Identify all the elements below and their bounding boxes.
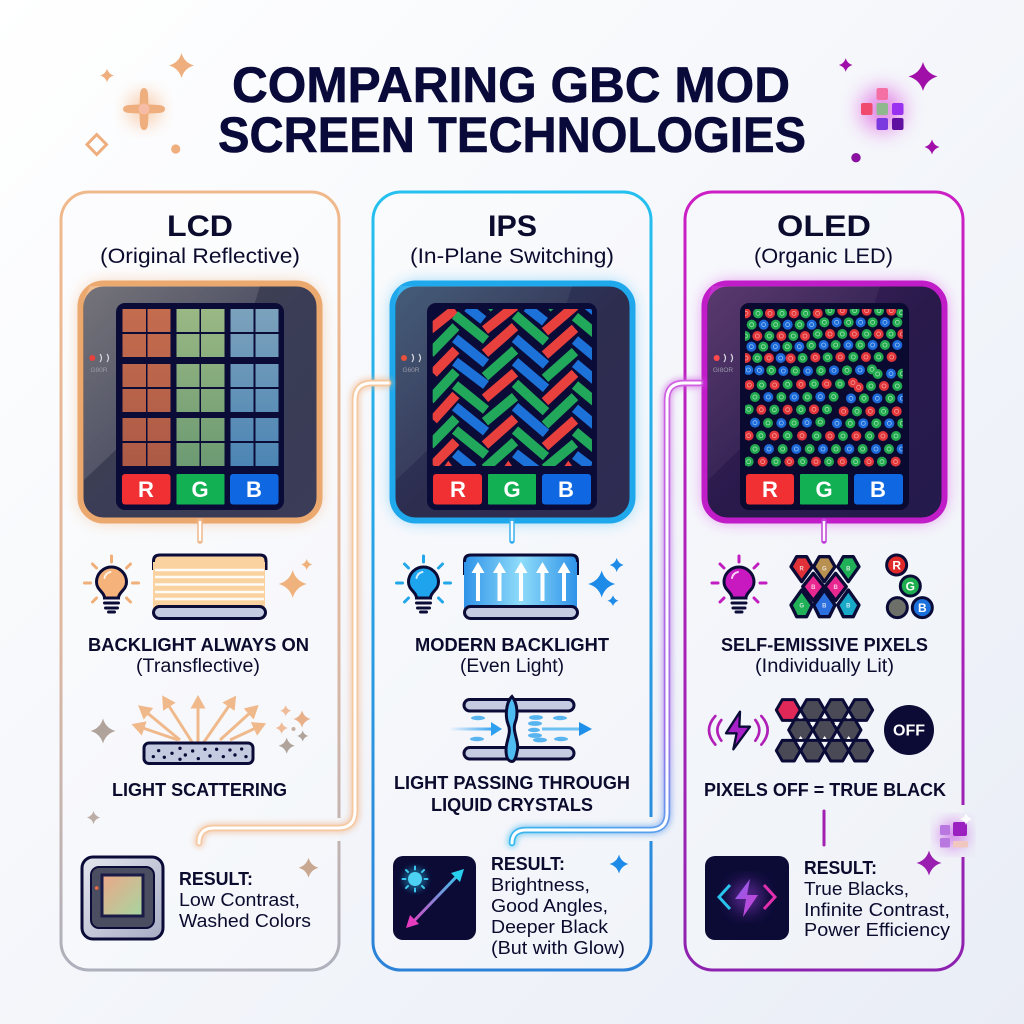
icon: RGB circles	[887, 555, 932, 618]
result text: OLED	[804, 857, 951, 940]
label: backlight always on	[88, 635, 309, 677]
icon: OFF badge: OFF	[893, 722, 925, 740]
icon: RGB hexagon emissive pixels: B	[822, 603, 827, 609]
icon: off pixels hexagon grid	[776, 700, 873, 761]
icon: viewing angle arrow with sun	[393, 856, 476, 940]
IPS device with herringbone pixels: R	[450, 477, 466, 502]
icon: light passing through liquid crystal	[449, 696, 592, 762]
IPS device with herringbone pixels	[392, 283, 633, 521]
IPS heading	[410, 210, 614, 268]
icon: backlight panel with horizontal lines	[153, 555, 266, 618]
icon: RGB hexagon emissive pixels: B	[846, 567, 851, 573]
OLED device with emissive dots: GI8OR	[713, 367, 733, 374]
IPS heading: IPS	[488, 210, 537, 243]
OLED heading	[754, 210, 893, 268]
result text: OLED: True Blacks,	[804, 878, 909, 899]
LCD device with RGB stripe grid	[80, 283, 320, 521]
icon: RGB circles: G	[906, 579, 915, 593]
result text: IPS: Good Angles,	[491, 895, 608, 916]
result text: IPS: RESULT:	[491, 853, 565, 874]
panel: OLED	[685, 192, 972, 970]
label: backlight always on: (Transflective)	[136, 656, 260, 677]
panel: IPS	[373, 192, 651, 970]
icon: Game Boy screen washed colors	[82, 857, 163, 939]
label: self-emissive pixels: SELF-EMISSIVE PIXELS	[721, 635, 928, 655]
result text: OLED: Infinite Contrast,	[804, 899, 950, 920]
icon: RGB hexagon emissive pixels: G	[799, 603, 804, 609]
decorative pixel cluster right	[839, 58, 940, 162]
label: pixels off true black: PIXELS OFF = TRUE BLACK	[704, 780, 946, 800]
label: light passing through liquid crystals: LIGHT PASSING THROUGH	[394, 773, 630, 793]
decorative sparkles left	[87, 53, 194, 154]
icon: RGB hexagon emissive pixels: B	[833, 585, 838, 591]
icon: even backlight with up arrows	[464, 555, 578, 618]
result text: IPS	[491, 853, 625, 958]
result text: LCD: RESULT:	[179, 868, 253, 889]
icon: RGB circles: B	[918, 601, 927, 615]
result text: LCD: Washed Colors	[179, 910, 311, 931]
sparkle	[610, 854, 628, 874]
result text: OLED: RESULT:	[804, 857, 877, 878]
OLED device with emissive dots: B	[870, 477, 886, 502]
sparkle	[916, 850, 942, 876]
icon: code chevrons and bolt	[705, 856, 789, 940]
result text: IPS: Brightness,	[491, 874, 590, 895]
result text: IPS: Deeper Black	[491, 916, 609, 937]
label: self-emissive pixels	[721, 635, 928, 677]
connector: IPS to OLED	[512, 383, 700, 843]
label: light scattering: LIGHT SCATTERING	[112, 780, 287, 800]
label: light passing through liquid crystals: LIQUID CRYSTALS	[431, 795, 593, 815]
result text: LCD: Low Contrast,	[179, 889, 300, 910]
LCD device with RGB stripe grid: G	[191, 477, 209, 502]
label: light passing through liquid crystals	[394, 773, 630, 815]
sparkle	[87, 811, 100, 824]
icon: power bolt with signal arcs	[709, 712, 768, 749]
label: modern backlight	[415, 635, 609, 677]
panel: LCD	[61, 192, 339, 970]
icon: RGB hexagon emissive pixels: B	[846, 603, 851, 609]
OLED device with emissive dots: R	[762, 477, 778, 502]
label: modern backlight: MODERN BACKLIGHT	[415, 635, 609, 655]
label: self-emissive pixels: (Individually Lit)	[755, 656, 894, 677]
LCD heading	[100, 210, 300, 268]
title: SCREEN TECHNOLOGIES	[218, 107, 806, 163]
connector: LCD to IPS	[199, 383, 388, 843]
OLED heading: OLED	[777, 210, 871, 243]
icon: RGB circles: R	[892, 558, 901, 572]
label: backlight always on: BACKLIGHT ALWAYS ON	[88, 635, 309, 655]
icon: RGB hexagon emissive pixels: G	[822, 567, 827, 573]
icon: orange sparkles	[279, 559, 312, 598]
sparkle	[298, 858, 318, 878]
icon: RGB hexagon emissive pixels	[791, 557, 859, 617]
OLED heading: (Organic LED)	[754, 245, 893, 268]
result text: LCD	[179, 868, 311, 931]
title: COMPARING GBC MOD	[232, 57, 790, 113]
icon: OFF badge	[884, 705, 934, 755]
IPS heading: (In-Plane Switching)	[410, 245, 614, 268]
icon: magenta light bulb	[712, 556, 766, 612]
result text: IPS: (But with Glow)	[491, 937, 625, 958]
icon: small pixel cluster on border	[939, 813, 972, 849]
title	[218, 57, 806, 163]
LCD connector stub	[196, 521, 204, 541]
LCD device with RGB stripe grid: G80R	[91, 367, 108, 374]
OLED device with emissive dots: G	[815, 477, 833, 502]
IPS device with herringbone pixels: G60R	[403, 367, 420, 374]
OLED device with emissive dots	[704, 283, 945, 521]
icon: RGB hexagon emissive pixels: B	[811, 585, 816, 591]
result text: OLED: Power Efficiency	[804, 919, 951, 940]
icon: light scattering fan of arrows	[90, 703, 310, 764]
IPS device with herringbone pixels: G	[503, 477, 521, 502]
LCD heading: LCD	[167, 210, 233, 243]
LCD heading: (Original Reflective)	[100, 245, 300, 268]
OLED result stub	[822, 811, 826, 845]
icon: RGB hexagon emissive pixels: R	[799, 567, 804, 573]
IPS device with herringbone pixels: B	[558, 477, 574, 502]
label: modern backlight: (Even Light)	[460, 656, 564, 677]
LCD device with RGB stripe grid: B	[246, 477, 262, 502]
icon: orange light bulb	[84, 556, 138, 612]
LCD device with RGB stripe grid: R	[138, 477, 154, 502]
IPS connector stub	[508, 521, 516, 541]
icon: blue light bulb	[396, 556, 450, 612]
icon: blue sparkles	[588, 558, 624, 606]
OLED connector stub	[820, 521, 828, 541]
